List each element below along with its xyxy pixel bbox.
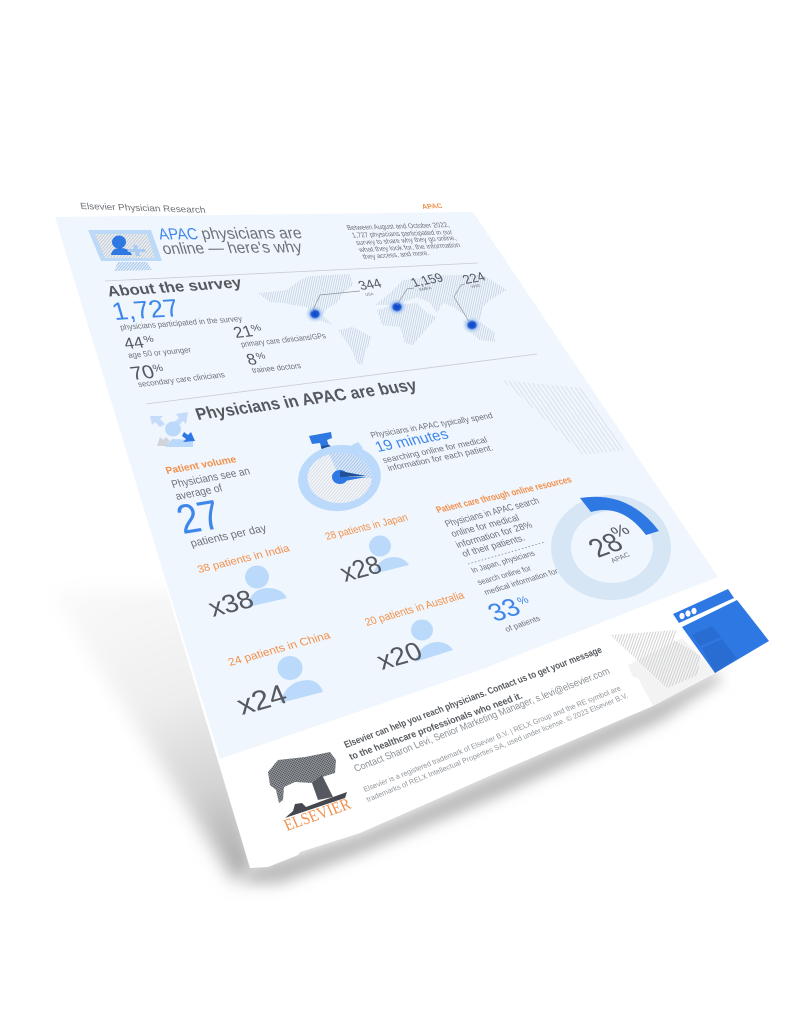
world map with survey locations: USA <box>364 291 375 297</box>
world map with survey locations <box>258 269 507 365</box>
country: Japan: 28 patients in Japan <box>324 512 410 543</box>
country: China <box>226 629 333 721</box>
stat: 21%: % <box>249 323 263 333</box>
text: 19 minutes: searching online for medical <box>381 435 489 465</box>
panel: patient care through online resources: search online for <box>475 564 533 587</box>
panel: patient care through online resources: Physicians in APAC search <box>443 496 541 530</box>
title: online — here's why <box>160 238 305 258</box>
country: India: 38 patients in India <box>196 542 292 576</box>
country: Japan <box>324 512 410 588</box>
world map with survey locations: EMEA <box>418 285 433 292</box>
donut chart: 28% APAC <box>551 495 671 600</box>
stat: 44%: 44 <box>122 334 146 353</box>
stat: 70% <box>128 361 167 385</box>
panel: patient care through online resources <box>434 475 574 634</box>
world map with survey locations: APAC <box>470 283 481 289</box>
title <box>156 224 305 258</box>
light blue content panel <box>55 212 718 759</box>
title: APAC <box>156 225 200 243</box>
panel: patient care through online resources: medical information for <box>482 567 560 597</box>
panel: patient care through online resources: of their patients. <box>460 533 527 560</box>
stat: 70%: 70 <box>128 362 158 385</box>
donut chart: 28% APAC: 28 <box>582 528 630 564</box>
world map with survey locations: 224 <box>460 269 489 287</box>
page drop shadow: bottom <box>246 672 722 884</box>
label: trainee doctors: trainee doctors <box>250 361 302 375</box>
heading: about the survey: About the survey <box>105 275 244 300</box>
intro paragraph: Between August and October 2022, <box>345 220 451 232</box>
text: 19 minutes: information for each patient. <box>386 443 495 473</box>
icon: person with arrows <box>150 412 195 447</box>
panel: patient volume: 27 <box>171 491 227 543</box>
donut chart: 28% APAC: APAC <box>609 551 632 565</box>
country: India: x38 <box>204 584 258 623</box>
country: China: 24 patients in China <box>226 629 333 669</box>
footer call to action: to the healthcare professionals who need it. <box>348 691 524 763</box>
heading: physicians in APAC are busy: Physicians in APAC are busy <box>193 375 420 424</box>
stat: 1,727 <box>109 295 244 332</box>
panel: patient care through online resources: 33 <box>482 592 526 627</box>
text: 19 minutes: 19 minutes <box>372 426 452 456</box>
country: Japan: x28 <box>335 550 386 588</box>
Elsevier logo <box>268 752 354 835</box>
text: 19 minutes: Physicians in APAC typically spend <box>369 410 494 440</box>
header label: Elsevier Physician Research <box>79 201 206 215</box>
decorative hatched shape <box>502 380 625 455</box>
stat: 21% <box>231 322 265 342</box>
stat: 70%: % <box>151 363 165 375</box>
stat: 8% <box>244 350 269 369</box>
stat: 44% <box>122 333 157 353</box>
panel: patient care through online resources: In Japan, physicians <box>469 549 536 575</box>
donut chart: 28% APAC: % <box>607 521 634 541</box>
country: Australia: 20 patients in Australia <box>363 589 467 629</box>
footer legal text: trademarks of RELX Intellectual Properties SA, used under license. © 2023 Elsevier B.V. <box>365 691 630 804</box>
stat: 21%: 21 <box>231 323 255 342</box>
footer call to action: Contact Sharon Levi, Senior Marketing Manager, s.levi@elsevier.com <box>352 666 612 775</box>
country: Australia: x20 <box>372 636 427 675</box>
label: secondary care: secondary care clinicians <box>137 370 226 389</box>
stat: 44%: % <box>142 334 155 344</box>
label: age: age 50 or younger <box>127 345 193 360</box>
panel: patient care through online resources: of patients <box>503 614 542 634</box>
intro paragraph <box>345 220 462 261</box>
decorative hatch and grey block <box>610 630 715 706</box>
panel: patient volume: patients per day <box>189 522 269 550</box>
panel: patient volume: Physicians see an <box>170 465 252 491</box>
stat: 8%: 8 <box>244 351 259 369</box>
panel: patient care through online resources: online for medical <box>449 513 521 540</box>
icon: monitor with person <box>88 230 162 271</box>
survey location: APAC <box>462 316 482 334</box>
country: India <box>196 542 292 623</box>
white page sheet <box>55 200 769 868</box>
footer call to action: Elsevier can help you reach physicians. Contact us to get your message <box>342 645 604 751</box>
label: primary care: primary care clinicians/GPs <box>239 331 327 349</box>
text: 19 minutes <box>369 410 495 473</box>
country: China: x24 <box>232 679 292 721</box>
intro paragraph: 1,727 physicians participated in our <box>350 228 454 239</box>
survey location: USA <box>305 305 325 323</box>
stat: 1,727: physicians participated in the survey <box>119 314 244 332</box>
country: Australia <box>363 589 467 675</box>
survey location: EMEA <box>387 298 407 316</box>
region tag: APAC <box>420 201 445 211</box>
icon: stopwatch <box>294 432 385 516</box>
panel: patient volume: average of <box>174 482 225 503</box>
page drop shadow: left <box>50 590 255 882</box>
world map with survey locations: 344 <box>356 276 385 293</box>
panel: patient care through online resources: information for 28% <box>454 520 535 551</box>
stat: 8%: % <box>254 351 267 361</box>
panel: patient care through online resources: Patient care through online resources <box>434 475 574 516</box>
world map with survey locations: 1,159 <box>408 270 446 290</box>
Elsevier logo: ELSEVIER <box>281 794 354 835</box>
icon: browser window <box>673 589 769 673</box>
panel: patient volume: Patient volume <box>164 454 238 477</box>
panel: patient care through online resources: % <box>515 594 531 608</box>
panel: patient volume <box>164 454 269 550</box>
intro paragraph: what they look for, the information <box>356 240 462 254</box>
footer legal text: Elsevier is a registered trademark of Elsevier B.V. | RELX Group and the RE symbol are <box>362 684 622 794</box>
title: physicians are <box>199 224 304 243</box>
intro paragraph: they access, and more. <box>361 248 431 261</box>
stat: 1,727: 1,727 <box>109 295 183 326</box>
intro paragraph: survey to share why they go online, <box>354 233 458 247</box>
